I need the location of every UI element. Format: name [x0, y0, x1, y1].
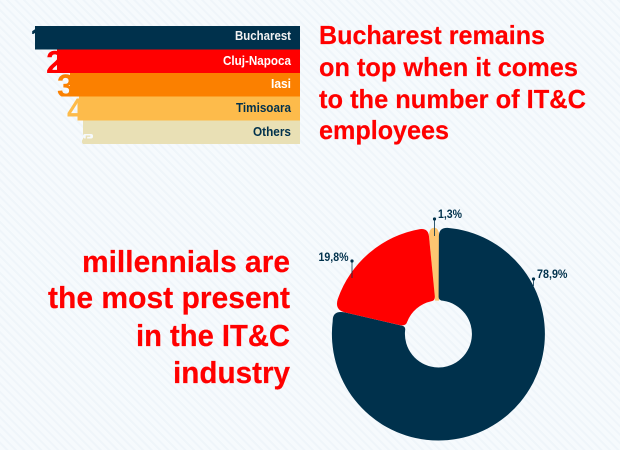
rank 3: Iasi [58, 73, 300, 96]
label: 1,3% [433, 209, 462, 236]
rank 3: Iasi: 3 [57, 68, 75, 104]
heading: millennials are the most present [48, 244, 291, 390]
donut chart: generations in IT&C [318, 209, 568, 440]
rank 1: Bucharest: 1 [30, 21, 48, 57]
rank 2: Cluj-Napoca [47, 50, 300, 73]
rank 4: Timisoara [68, 96, 300, 120]
slice: 78,9% [332, 228, 545, 440]
heading: Bucharest remains on top: to the number of IT&C [319, 84, 586, 114]
label: 78,9%: 78,9% [537, 269, 568, 281]
slice: 19,8% [337, 229, 435, 325]
ranking chart: IT&C employees by city [30, 21, 300, 147]
rank 1: Bucharest [32, 26, 300, 50]
heading: Bucharest remains on top: employees [319, 115, 449, 145]
label: 78,9% [532, 269, 568, 286]
label: 19,8% [318, 252, 354, 278]
rank 3: Iasi: Iasi [271, 77, 291, 91]
rank 4: Timisoara: Timisoara [236, 101, 292, 115]
heading: millennials are the most present: millennials are [82, 244, 290, 279]
rank 2: Cluj-Napoca: 2 [46, 44, 64, 80]
rank 5: Others: Others [253, 125, 291, 139]
heading: millennials are the most present: the most present [48, 280, 290, 315]
rank 1: Bucharest: Bucharest [235, 29, 292, 43]
heading: millennials are the most present: industry [173, 355, 291, 390]
heading: Bucharest remains on top: on top when it comes [319, 52, 578, 82]
heading: Bucharest remains on top [319, 20, 586, 145]
label: 1,3%: 1,3% [438, 209, 462, 221]
slice: 1,3% [429, 228, 439, 301]
rank 2: Cluj-Napoca: Cluj-Napoca [223, 54, 292, 68]
rank 4: Timisoara: 4 [67, 92, 85, 128]
rank 5: Others [82, 120, 300, 147]
rank 5: Others: 5 [85, 133, 91, 147]
heading: millennials are the most present: in the IT&C [136, 318, 290, 353]
label: 19,8%: 19,8% [318, 252, 348, 264]
heading: Bucharest remains on top: Bucharest remains [319, 20, 545, 50]
